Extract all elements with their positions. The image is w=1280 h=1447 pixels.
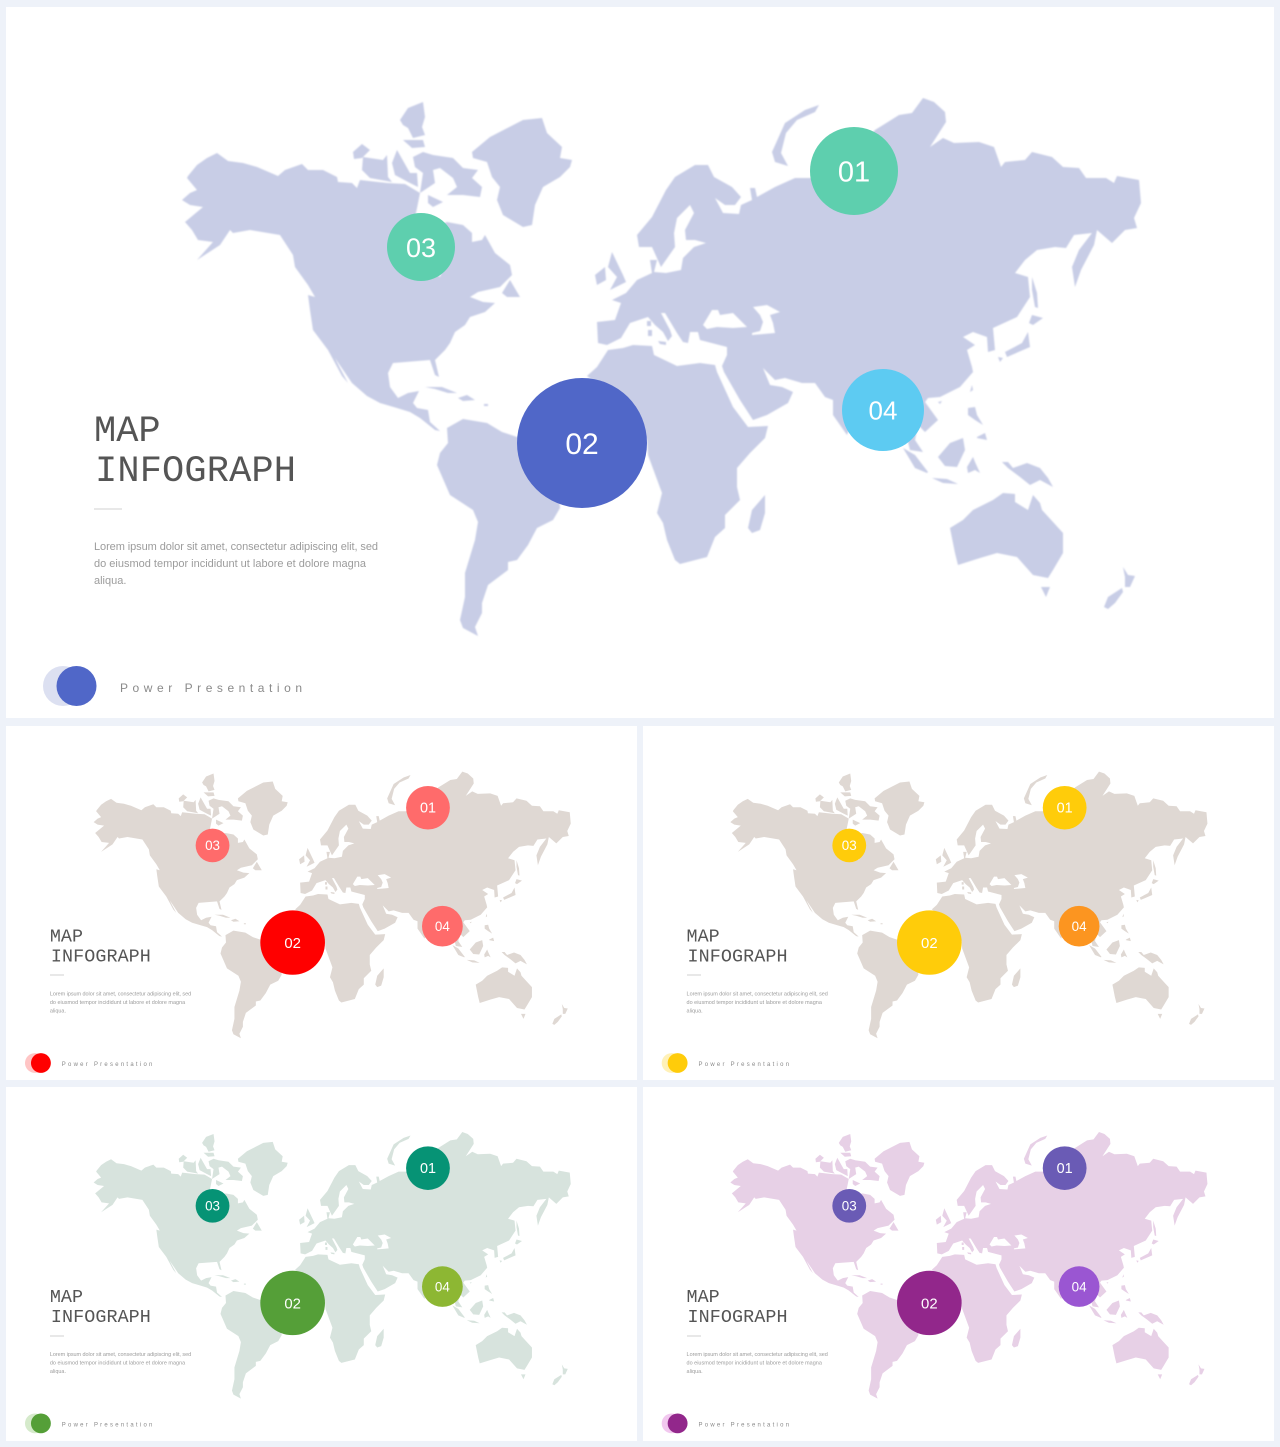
marker 02	[517, 378, 647, 508]
marker 02	[897, 1271, 962, 1335]
title: MAP	[50, 927, 83, 948]
body text: do eiusmod tempor incididunt ut labore et dolore magna	[687, 1360, 823, 1366]
slide content: yellow	[662, 772, 1207, 1073]
footer brand: Power Presentation	[62, 1422, 152, 1428]
footer brand: Power Presentation	[699, 1062, 789, 1068]
marker 01: 01	[1057, 1161, 1073, 1177]
title	[50, 1287, 151, 1328]
body text	[687, 992, 828, 1014]
body text: do eiusmod tempor incididunt ut labore et dolore magna	[50, 1000, 186, 1006]
footer brand	[662, 1413, 789, 1433]
title	[50, 927, 151, 967]
title: INFOGRAPH	[51, 946, 151, 967]
title: INFOGRAPH	[688, 946, 788, 967]
marker 01	[1043, 1146, 1087, 1190]
panel: yellow slide	[643, 726, 1274, 1080]
body text: Lorem ipsum dolor sit amet, consectetur adipiscing elit, sed	[687, 1352, 828, 1358]
panel: purple slide	[643, 1087, 1274, 1441]
world map	[94, 772, 571, 1038]
marker 03	[832, 1189, 866, 1223]
title: MAP	[687, 1287, 720, 1308]
title	[687, 1287, 788, 1328]
marker 03: 03	[205, 838, 220, 853]
body text: aliqua.	[94, 575, 126, 587]
world map	[730, 772, 1207, 1038]
body text	[50, 992, 191, 1014]
marker 04: 04	[435, 1280, 450, 1295]
marker 04	[1059, 906, 1099, 947]
panel: red slide	[6, 726, 637, 1080]
world map	[730, 1132, 1207, 1399]
marker 02: 02	[284, 936, 301, 952]
marker 03	[387, 213, 455, 281]
footer brand: Power Presentation	[120, 681, 302, 695]
footer brand	[25, 1413, 152, 1433]
title: INFOGRAPH	[95, 451, 296, 493]
title: MAP	[94, 411, 161, 453]
marker 02	[260, 1271, 325, 1335]
marker 04	[1059, 1266, 1099, 1307]
marker 04: 04	[1072, 1280, 1087, 1295]
footer brand	[25, 1053, 152, 1073]
panel: green slide	[6, 1087, 637, 1441]
panel: main slide (blue)	[6, 7, 1274, 718]
marker 04	[422, 906, 463, 947]
body text: aliqua.	[50, 1008, 66, 1014]
marker 03	[196, 1189, 229, 1223]
marker 01: 01	[838, 156, 870, 188]
title: MAP	[50, 1287, 83, 1308]
marker 04	[422, 1266, 463, 1307]
title	[94, 411, 296, 493]
footer brand: Power Presentation	[699, 1422, 789, 1428]
marker 02: 02	[921, 936, 938, 952]
marker 03	[196, 829, 229, 862]
slide content: green	[25, 1132, 571, 1433]
body text: Lorem ipsum dolor sit amet, consectetur adipiscing elit, sed	[94, 541, 378, 553]
marker 04: 04	[1072, 919, 1087, 934]
marker 03: 03	[842, 838, 857, 853]
marker 01: 01	[1057, 801, 1073, 817]
marker 03: 03	[205, 1198, 220, 1213]
marker 01	[810, 127, 898, 215]
marker 02	[260, 910, 325, 975]
marker 03: 03	[406, 233, 436, 263]
slide content: red	[25, 772, 571, 1073]
body text: aliqua.	[50, 1369, 66, 1375]
marker 02: 02	[565, 428, 599, 461]
title: INFOGRAPH	[51, 1307, 151, 1328]
footer brand	[43, 666, 302, 706]
marker 04: 04	[869, 396, 897, 426]
marker 03	[832, 829, 866, 862]
marker 02	[897, 910, 962, 975]
marker 03: 03	[842, 1198, 857, 1213]
marker 04: 04	[435, 919, 450, 934]
marker 01	[406, 1146, 450, 1190]
marker 04	[842, 369, 924, 451]
world map	[182, 98, 1141, 636]
body text: aliqua.	[687, 1369, 703, 1375]
footer brand	[662, 1053, 789, 1073]
body text: aliqua.	[687, 1008, 703, 1014]
body text: do eiusmod tempor incididunt ut labore et dolore magna	[687, 1000, 823, 1006]
title: INFOGRAPH	[688, 1307, 788, 1328]
marker 01: 01	[420, 1161, 436, 1177]
body text	[94, 541, 378, 587]
footer brand: Power Presentation	[62, 1062, 152, 1068]
marker 02: 02	[921, 1296, 938, 1312]
marker 01	[1043, 786, 1087, 830]
body text: Lorem ipsum dolor sit amet, consectetur adipiscing elit, sed	[50, 1352, 191, 1358]
title	[687, 927, 788, 967]
body text	[687, 1352, 828, 1375]
world map	[94, 1132, 571, 1399]
body text: do eiusmod tempor incididunt ut labore et dolore magna	[94, 558, 367, 570]
body text: Lorem ipsum dolor sit amet, consectetur adipiscing elit, sed	[687, 992, 828, 998]
marker 01: 01	[420, 801, 436, 817]
body text: do eiusmod tempor incididunt ut labore et dolore magna	[50, 1360, 186, 1366]
body text: Lorem ipsum dolor sit amet, consectetur adipiscing elit, sed	[50, 992, 191, 998]
body text	[50, 1352, 191, 1375]
title: MAP	[687, 927, 720, 948]
slide content: purple	[662, 1132, 1207, 1433]
marker 01	[406, 786, 450, 830]
marker 02: 02	[284, 1296, 301, 1312]
